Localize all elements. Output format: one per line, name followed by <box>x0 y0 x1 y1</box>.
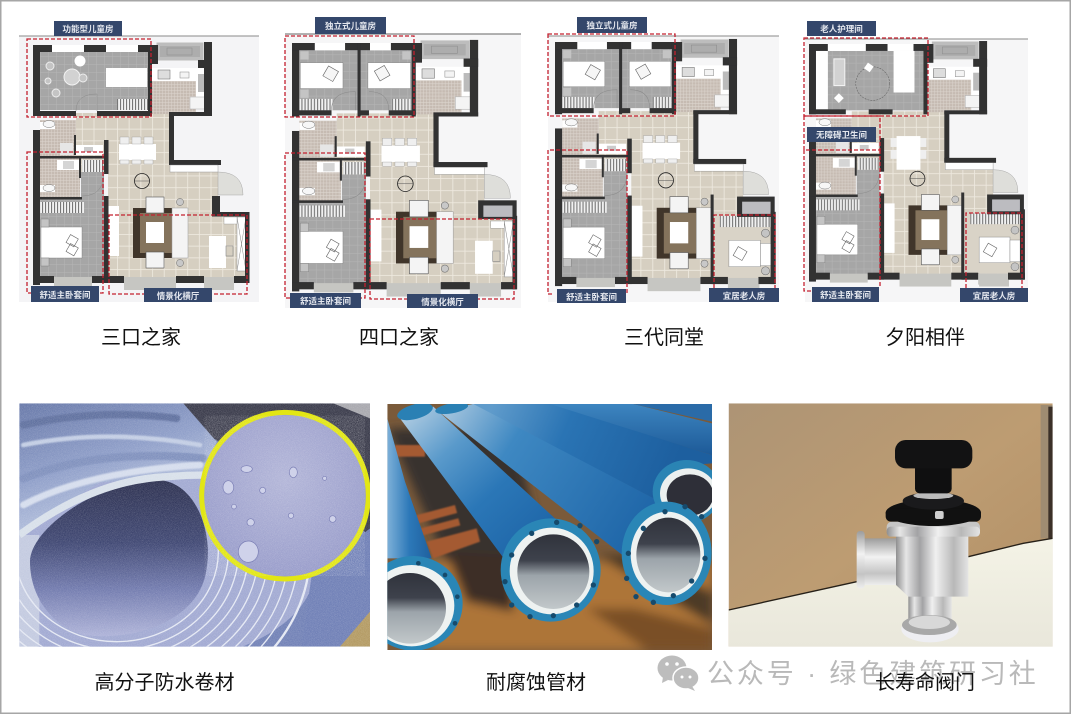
floor plan drawing <box>555 39 776 291</box>
caption: 高分子防水卷材: 高分子防水卷材 <box>94 671 234 694</box>
label: 老人护理间 <box>807 21 876 36</box>
label: 舒适主卧套间: 舒适主卧套间 <box>39 290 91 300</box>
label: 独立式儿童房: 独立式儿童房 <box>586 20 638 30</box>
label: 舒适主卧套间: 舒适主卧套间 <box>300 296 351 306</box>
label: 舒适主卧套间: 舒适主卧套间 <box>566 292 617 302</box>
label: 舒适主卧套间 <box>812 287 879 302</box>
label: 无障碍卫生间 <box>807 127 876 142</box>
caption: 三口之家: 三口之家 <box>101 326 181 349</box>
label: 情景化横厅 <box>144 288 212 302</box>
pipe flanges <box>364 460 721 651</box>
label: 舒适主卧套间 <box>31 286 99 302</box>
valve body <box>857 440 981 642</box>
caption: 夕阳相伴: 夕阳相伴 <box>885 326 965 349</box>
ground and timber <box>387 428 712 650</box>
label: 舒适主卧套间 <box>557 289 626 303</box>
caption: 耐腐蚀管材: 耐腐蚀管材 <box>486 671 586 694</box>
photo: corrosion-resistant pipes <box>387 404 712 650</box>
label: 功能型儿童房 <box>54 21 122 36</box>
caption: 三代同堂: 三代同堂 <box>624 326 704 349</box>
label: 宜居老人房: 宜居老人房 <box>723 291 765 301</box>
label: 无障碍卫生间: 无障碍卫生间 <box>816 130 867 140</box>
zone outlines <box>27 39 247 294</box>
distant pipes <box>387 400 712 560</box>
panel: floor plan, family of four <box>285 17 521 308</box>
zone outlines <box>285 36 514 299</box>
label: 情景化横厅: 情景化横厅 <box>421 297 464 307</box>
watermark text: 公众号 · 绿色建筑研习社 <box>707 659 1039 689</box>
panel: floor plan, elderly couple <box>804 21 1028 302</box>
label: 独立式儿童房 <box>577 17 647 33</box>
label: 独立式儿童房 <box>315 17 386 34</box>
label: 老人护理间: 老人护理间 <box>820 24 863 34</box>
label: 宜居老人房 <box>709 288 779 302</box>
label: 功能型儿童房: 功能型儿童房 <box>62 24 114 34</box>
label: 情景化横厅: 情景化横厅 <box>157 291 200 301</box>
floor plan drawing <box>292 40 517 297</box>
label: 宜居老人房 <box>960 288 1028 302</box>
zone outlines <box>548 34 775 294</box>
magnifier circle with droplets <box>202 412 368 579</box>
floor plan drawing <box>809 41 1025 287</box>
caption: 四口之家: 四口之家 <box>359 326 439 349</box>
label: 独立式儿童房: 独立式儿童房 <box>325 21 376 31</box>
label: 情景化横厅 <box>407 294 478 308</box>
icon: wechat logo <box>658 656 699 691</box>
label: 宜居老人房: 宜居老人房 <box>973 291 1015 301</box>
floor plan drawing <box>33 42 250 290</box>
photo: long-life valve <box>729 403 1053 647</box>
zone outlines <box>804 38 1022 291</box>
label: 舒适主卧套间: 舒适主卧套间 <box>820 290 871 300</box>
panel: floor plan, three generations <box>548 17 779 303</box>
caption: 长寿命阀门: 长寿命阀门 <box>875 671 975 694</box>
photo: waterproof membrane roll <box>19 403 370 647</box>
panel: floor plan, family of three <box>19 21 259 302</box>
label: 舒适主卧套间 <box>290 293 361 308</box>
